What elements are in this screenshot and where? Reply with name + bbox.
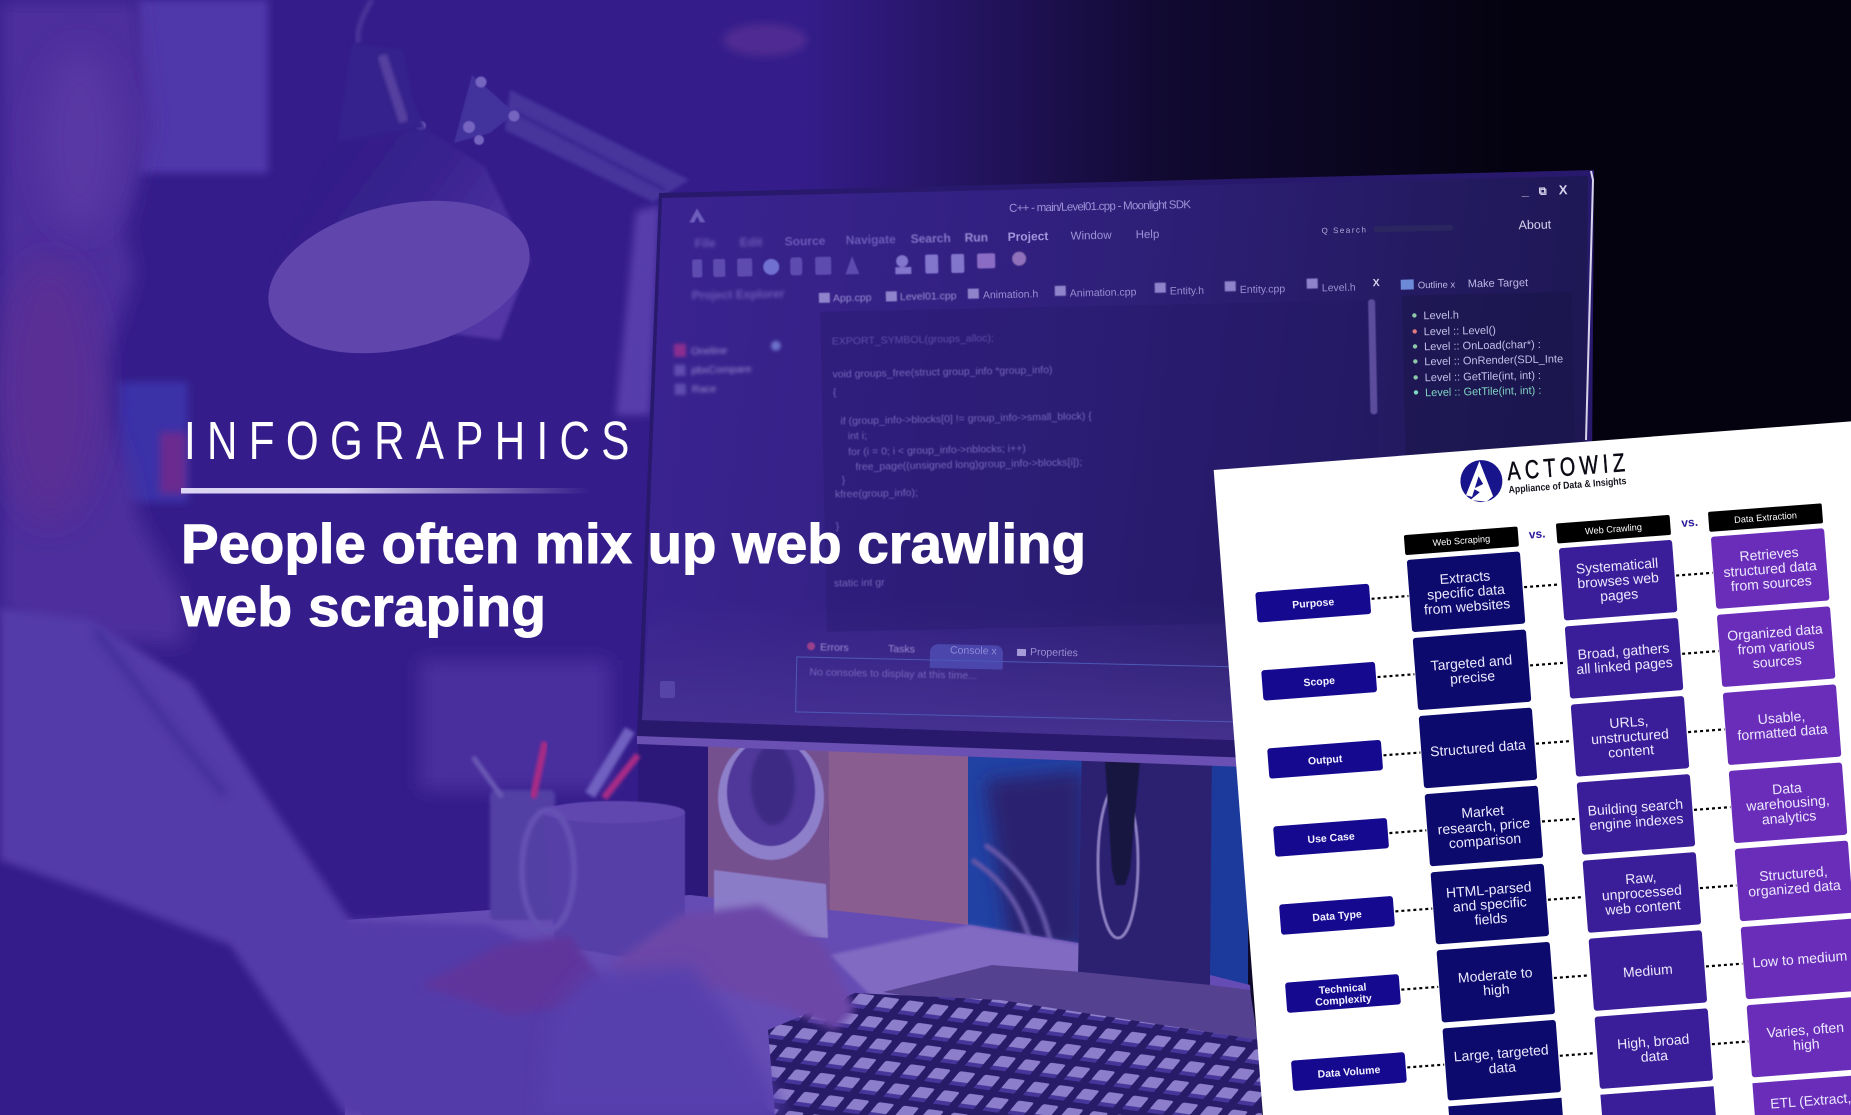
cell: html: and specific bbox=[1452, 893, 1527, 915]
divider rule bbox=[181, 488, 591, 494]
row 8 partial cells bbox=[1448, 1076, 1851, 1115]
cell: high: High, broad bbox=[1617, 1031, 1690, 1052]
cell: structured organized: Structured, bbox=[1759, 863, 1828, 884]
cell: targeted: Targeted and bbox=[1430, 651, 1513, 674]
background warm blur bbox=[723, 24, 807, 56]
lamp neck highlight bbox=[382, 55, 404, 122]
console tab highlight bbox=[930, 644, 1003, 670]
comparison infographic content bbox=[1246, 433, 1851, 1115]
cable plug bbox=[1105, 760, 1140, 885]
lamp pole bbox=[358, 0, 372, 43]
console tabs bbox=[796, 641, 1242, 722]
cell: high: data bbox=[1640, 1047, 1669, 1065]
cell: market: comparison bbox=[1448, 830, 1522, 851]
blue reflection beside the neck bbox=[118, 382, 188, 502]
monitor bbox=[637, 170, 1594, 780]
window controls: X bbox=[1559, 182, 1568, 197]
mug rim bbox=[543, 801, 685, 823]
cell: systematically: browses web bbox=[1577, 569, 1660, 591]
editor tabs: App.cpp bbox=[833, 292, 872, 305]
editor tabs: Entity.cpp bbox=[1240, 283, 1285, 296]
editor tabs: Entity.h bbox=[1170, 285, 1204, 298]
cell: low to medium: Low to medium bbox=[1752, 947, 1848, 971]
outline panel: Level.h bbox=[1423, 309, 1459, 322]
cell: structured organized bbox=[1735, 840, 1851, 921]
label: use case: Use Case bbox=[1307, 831, 1355, 846]
window controls bbox=[1521, 182, 1568, 198]
editor tabs: Animation.h bbox=[983, 288, 1039, 301]
cell: html: HTML-parsed bbox=[1445, 878, 1532, 901]
logo mark bbox=[1459, 459, 1504, 504]
label: purpose bbox=[1255, 584, 1371, 623]
menu bar: Edit bbox=[740, 235, 763, 250]
project explorer: pbxCompare bbox=[691, 363, 752, 377]
code lines: EXPORT_SYMBOL(groups_alloc); bbox=[832, 332, 994, 348]
speaker front bbox=[708, 735, 830, 955]
hand right bbox=[610, 905, 855, 1030]
speaker side bbox=[828, 740, 968, 955]
heading: INFOGRAPHICS: INFOGRAPHICS bbox=[184, 411, 629, 471]
code lines: for (i = 0; i < group_info->nblocks; i++) bbox=[848, 443, 1026, 458]
pink pencil right bbox=[604, 755, 638, 798]
speaker ring bbox=[718, 736, 824, 860]
label: purpose: Purpose bbox=[1292, 596, 1335, 611]
cell: building bbox=[1577, 774, 1695, 855]
white pencil bbox=[590, 730, 630, 795]
cell: targeted: precise bbox=[1449, 667, 1496, 687]
coffee mug bbox=[522, 801, 685, 960]
logo tagline: Appliance of Data & Insights bbox=[1508, 476, 1627, 496]
outline panel: Level :: GetTile(int, int) : bbox=[1425, 385, 1541, 399]
cell: large bbox=[1442, 1020, 1561, 1101]
title bar text: C++ - main/Level01.cpp - Moonlight SDK bbox=[1009, 199, 1191, 215]
cell: varies: high bbox=[1793, 1035, 1820, 1053]
lamp arm gap bbox=[515, 112, 665, 190]
console tabs: Properties bbox=[1030, 646, 1078, 659]
cell: retrieves bbox=[1711, 528, 1829, 609]
label: data type: Data Type bbox=[1312, 908, 1362, 924]
mug handle bbox=[522, 810, 574, 930]
desk highlight bbox=[830, 925, 1085, 1005]
menu bar: About bbox=[1518, 218, 1552, 232]
stand column bbox=[1078, 745, 1212, 985]
code lines: int i; bbox=[848, 430, 867, 442]
vs 2: vs. bbox=[1681, 515, 1699, 530]
label: technical complexity bbox=[1285, 974, 1401, 1013]
cell: systematically: Systematicall bbox=[1575, 555, 1659, 577]
menu bar: Run bbox=[965, 230, 988, 245]
cell: extracts: specific data bbox=[1427, 581, 1506, 603]
label: data type bbox=[1279, 896, 1395, 935]
menu bar: Source bbox=[785, 234, 826, 249]
window controls: ⧉ bbox=[1539, 186, 1547, 198]
console tabs: Console x bbox=[950, 644, 998, 657]
outline panel: Level :: Level() bbox=[1424, 325, 1496, 338]
grey pencil bbox=[473, 757, 502, 797]
light wall strip beside the monitor bbox=[616, 205, 660, 415]
cell: broad bbox=[1565, 618, 1683, 699]
console tabs: Tasks bbox=[888, 643, 915, 656]
cell: structured: Structured data bbox=[1430, 736, 1526, 760]
menu bar: Search bbox=[911, 231, 951, 246]
cables bbox=[972, 845, 1052, 950]
cell: urls: URLs, bbox=[1609, 712, 1649, 731]
label: scope bbox=[1261, 662, 1377, 701]
partial cell: web scraping bbox=[1448, 1098, 1563, 1115]
menu bar: Project bbox=[1008, 229, 1048, 244]
lamp bracket bbox=[454, 75, 515, 143]
column: web crawling bbox=[1559, 540, 1713, 1089]
lamp arm bbox=[505, 90, 689, 202]
cell: large: data bbox=[1488, 1058, 1517, 1077]
header: web crawling: Web Crawling bbox=[1585, 522, 1642, 536]
cell: extracts: Extracts bbox=[1439, 567, 1491, 587]
cell: targeted bbox=[1413, 629, 1531, 710]
cell: large: Large, targeted bbox=[1453, 1041, 1549, 1065]
header: web scraping bbox=[1404, 526, 1519, 555]
logo wordmark: ACTOWIZ bbox=[1506, 448, 1626, 486]
column: data extraction bbox=[1711, 528, 1851, 1113]
cell: raw: unprocessed bbox=[1601, 881, 1682, 904]
label: data volume: Data Volume bbox=[1317, 1064, 1381, 1081]
cell: retrieves: structured data bbox=[1723, 557, 1817, 580]
speaker centre bbox=[751, 745, 795, 825]
console tabs: No consoles to display at this time... bbox=[809, 666, 977, 682]
code lines: { bbox=[833, 387, 837, 399]
pencil cup bbox=[473, 730, 638, 920]
cell: medium bbox=[1589, 930, 1707, 1011]
editor tabs bbox=[819, 277, 1380, 305]
cell: low to medium bbox=[1741, 919, 1851, 999]
editor tabs: X bbox=[1373, 277, 1380, 289]
headline bbox=[180, 512, 1086, 638]
lamp shade bbox=[270, 128, 530, 340]
cell: extracts bbox=[1407, 551, 1525, 632]
cell: market: research, price bbox=[1437, 814, 1531, 838]
outline panel: Level :: OnLoad(char*) : bbox=[1424, 339, 1541, 353]
code lines: } bbox=[836, 521, 840, 533]
blue glow bbox=[968, 745, 1088, 945]
blue glow right of stand bbox=[1208, 745, 1248, 985]
column: web scraping bbox=[1407, 551, 1561, 1101]
project explorer: Project Explorer bbox=[692, 287, 785, 303]
cell: warehousing: analytics bbox=[1761, 807, 1817, 827]
cell: varies: Varies, often bbox=[1766, 1019, 1845, 1041]
code lines: free_page((unsigned long)group_info->blocks[i]); bbox=[855, 456, 1082, 473]
dotted connectors bbox=[1372, 573, 1748, 1067]
label: technical complexity: Technical bbox=[1318, 981, 1367, 997]
cell: structured organized: organized data bbox=[1748, 877, 1841, 900]
cup glass bbox=[490, 790, 555, 920]
cell: usable bbox=[1723, 684, 1841, 765]
cell: medium: Medium bbox=[1622, 961, 1673, 980]
menu bar: Q Search bbox=[1322, 225, 1367, 235]
cell: usable: formatted data bbox=[1737, 721, 1828, 743]
label: scope: Scope bbox=[1303, 675, 1336, 689]
cell: moderate bbox=[1436, 942, 1555, 1023]
project explorer: Oneline bbox=[691, 345, 727, 358]
background window bbox=[138, 0, 268, 173]
headline line 1: People often mix up web crawling bbox=[181, 512, 1086, 575]
desk surface bbox=[345, 895, 1260, 1115]
app logo bbox=[689, 208, 705, 223]
cell: varies bbox=[1747, 997, 1851, 1077]
menu bar: Help bbox=[1136, 229, 1159, 241]
cell: raw: Raw, bbox=[1625, 869, 1657, 887]
label: output: Output bbox=[1308, 753, 1343, 768]
logo letter bbox=[1463, 460, 1493, 503]
cell: raw: web content bbox=[1604, 896, 1681, 918]
label: technical complexity: Complexity bbox=[1315, 992, 1372, 1009]
cell: moderate: high bbox=[1483, 980, 1510, 998]
monitor screen lower tint bbox=[642, 600, 1585, 752]
outline panel: Make Target bbox=[1468, 277, 1528, 290]
background objects behind the monitor stand bbox=[638, 735, 1248, 985]
cell: organized: Organized data bbox=[1727, 620, 1823, 644]
cell: building: Building search bbox=[1587, 796, 1684, 819]
cell: warehousing: warehousing, bbox=[1745, 792, 1830, 814]
code lines: static int gr bbox=[834, 577, 885, 590]
keys between the hands bbox=[482, 1003, 582, 1030]
vs 1: vs. bbox=[1528, 526, 1546, 542]
cell: high bbox=[1594, 1008, 1713, 1089]
outline panel: Outline x bbox=[1418, 280, 1456, 291]
logo bbox=[1459, 447, 1627, 504]
editor tabs: Level01.cpp bbox=[900, 290, 957, 303]
console tabs: Errors bbox=[820, 641, 849, 654]
partial cell: data extraction bbox=[1752, 1076, 1851, 1115]
cell: moderate: Moderate to bbox=[1457, 964, 1533, 986]
cell: warehousing bbox=[1729, 762, 1847, 843]
header: data extraction: Data Extraction bbox=[1734, 510, 1797, 525]
cell: organized bbox=[1717, 606, 1835, 687]
audio device bbox=[714, 870, 828, 938]
cell: structured bbox=[1419, 708, 1537, 788]
row labels bbox=[1255, 584, 1407, 1091]
shirt bottom edge bbox=[352, 1100, 775, 1115]
cell: extracts: from websites bbox=[1423, 595, 1511, 618]
cell: organized: sources bbox=[1752, 651, 1802, 671]
lamp opening bbox=[253, 177, 545, 377]
code lines: void groups_free(struct group_info *group_info) bbox=[832, 364, 1053, 381]
cell: usable: Usable, bbox=[1757, 708, 1806, 727]
code lines: } bbox=[842, 474, 846, 486]
cell: systematically: pages bbox=[1600, 585, 1639, 604]
menu bar: Navigate bbox=[846, 232, 896, 247]
code panel bbox=[820, 300, 1382, 632]
IDE interface bbox=[671, 182, 1579, 635]
monitor frame bbox=[637, 170, 1594, 770]
cell: market bbox=[1425, 786, 1543, 866]
cable loop bbox=[1098, 786, 1138, 938]
outline panel: Level :: OnRender(SDL_Inte bbox=[1424, 353, 1563, 368]
sleeve right bbox=[540, 965, 785, 1115]
desk lamp bbox=[253, 0, 689, 377]
editor scrollbar bbox=[1368, 299, 1377, 414]
keyboard bbox=[768, 993, 1262, 1115]
pink reflection beside the neck bbox=[160, 432, 186, 494]
code lines: if (group_info->blocks[0] != group_info->small_block) { bbox=[840, 410, 1092, 427]
cell: retrieves: Retrieves bbox=[1739, 544, 1799, 564]
outline panel: Level :: GetTile(int, int) : bbox=[1425, 370, 1541, 384]
partial cell: web crawling bbox=[1600, 1086, 1716, 1115]
shirt fold bbox=[95, 630, 225, 795]
code lines bbox=[829, 330, 1096, 590]
cell: organized: from various bbox=[1737, 636, 1815, 658]
window controls: _ bbox=[1521, 183, 1530, 198]
mug body bbox=[543, 812, 685, 960]
cell: broad: all linked pages bbox=[1576, 654, 1673, 677]
label: output bbox=[1267, 740, 1383, 779]
lamp neck bbox=[337, 43, 425, 143]
menu bar: File bbox=[695, 236, 716, 250]
code lines: kfree(group_info); bbox=[835, 487, 918, 501]
person body bbox=[0, 608, 770, 1115]
label: data volume bbox=[1291, 1052, 1407, 1091]
cell: broad: Broad, gathers bbox=[1577, 640, 1670, 662]
editor tabs: Animation.cpp bbox=[1070, 286, 1137, 300]
background shelf blur bbox=[420, 660, 610, 790]
cell: urls: unstructured bbox=[1591, 725, 1669, 747]
cell: building: engine indexes bbox=[1589, 810, 1684, 833]
grid icon bbox=[660, 681, 675, 698]
dark patch bbox=[985, 770, 1085, 950]
dark cabinet bbox=[638, 735, 708, 900]
stand base bbox=[883, 965, 1258, 1060]
cell: urls bbox=[1571, 696, 1689, 777]
head highlight bbox=[40, 50, 120, 230]
monitor stand bbox=[883, 745, 1258, 1060]
cell: html bbox=[1431, 864, 1549, 944]
monitor edge highlight bbox=[1586, 171, 1593, 440]
editor tabs: Level.h bbox=[1322, 282, 1356, 294]
header: web crawling bbox=[1556, 515, 1671, 543]
cell: warehousing: Data bbox=[1771, 779, 1802, 797]
person head bbox=[0, 0, 184, 645]
comparison card sheet bbox=[1214, 421, 1851, 1115]
pink pencil bbox=[533, 742, 545, 798]
outline panel bbox=[1401, 276, 1575, 461]
header: data extraction bbox=[1708, 503, 1823, 532]
menu bar bbox=[695, 218, 1552, 250]
monitor screen bbox=[642, 176, 1588, 752]
speaker cone bbox=[727, 738, 815, 846]
cell: systematically bbox=[1559, 540, 1677, 621]
cell: urls: content bbox=[1608, 741, 1655, 761]
monitor lower strip bbox=[637, 732, 1590, 780]
cell: html: fields bbox=[1474, 909, 1508, 928]
cell: raw bbox=[1583, 852, 1701, 933]
lamp joints bbox=[416, 76, 520, 145]
cell: market: Market bbox=[1461, 802, 1505, 821]
toolbar icons bbox=[692, 252, 1026, 279]
cell text: etl: ETL (Extract, bbox=[1770, 1089, 1851, 1112]
column headers bbox=[1404, 503, 1823, 555]
headline line 2: web scraping bbox=[180, 575, 546, 638]
cell: retrieves: from sources bbox=[1730, 572, 1812, 594]
hand left bbox=[420, 935, 605, 1015]
menu bar: Window bbox=[1071, 230, 1112, 243]
head mottling bbox=[0, 260, 100, 520]
project explorer bbox=[673, 287, 787, 396]
project explorer: Race bbox=[692, 383, 717, 396]
header: web scraping: Web Scraping bbox=[1432, 534, 1490, 548]
label: use case bbox=[1273, 818, 1389, 857]
